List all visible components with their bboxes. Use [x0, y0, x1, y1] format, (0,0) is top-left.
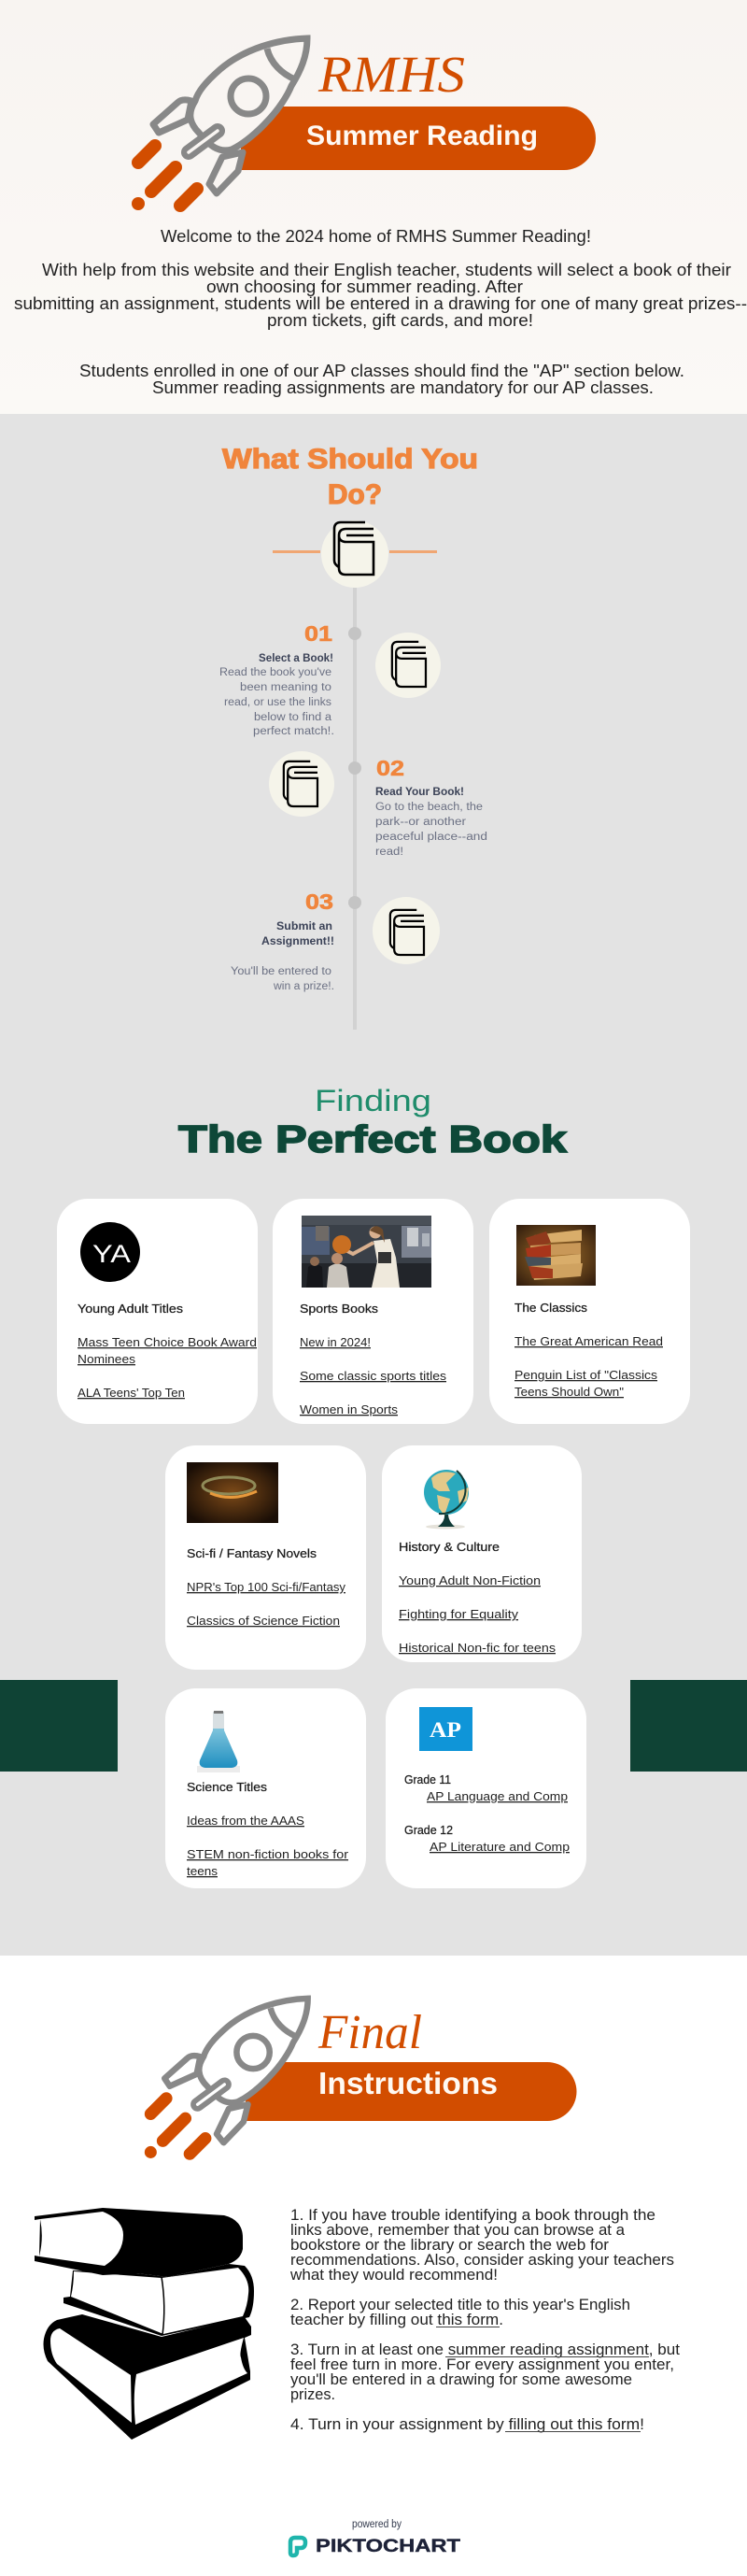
step 2: 2. Report your selected title to this year's English — [290, 2297, 630, 2313]
step 3: you'll be entered in a drawing for some awesome — [290, 2371, 632, 2388]
step 01: perfect match!. — [253, 726, 334, 737]
text block: welcome: prom tickets, gift cards, and more! — [267, 311, 533, 330]
step 1: 1. If you have trouble identifying a book through the — [290, 2207, 655, 2224]
panel: grey section background — [0, 414, 747, 1956]
card: sports books: Women in Sports — [300, 1402, 399, 1416]
step 01: Read the book you've — [219, 667, 331, 678]
icon: rocket — [145, 1999, 308, 2158]
card: science titles — [165, 1688, 366, 1888]
card: science titles: Ideas from the AAAS — [187, 1814, 304, 1828]
subtitle: Summer Reading: Summer Reading — [306, 121, 538, 151]
icon: globe — [424, 1470, 469, 1529]
orange banner pill — [241, 107, 596, 170]
step 01: below to find a — [254, 712, 332, 723]
card: young adult titles: ALA Teens' Top Ten — [78, 1386, 185, 1400]
text block: welcome: Summer reading assignments are mandatory for our AP classes. — [152, 378, 654, 397]
card: AP classes: Grade 11 — [404, 1772, 451, 1786]
card: history and culture: Fighting for Equality — [399, 1607, 519, 1621]
decorative band: right — [630, 1680, 747, 1772]
icon: AP logo: AP — [430, 1718, 461, 1742]
title: Final: Final — [317, 2006, 422, 2059]
card: sports books: New in 2024! — [300, 1335, 371, 1349]
footer: powered by piktochart: powered by — [352, 2519, 402, 2530]
card: the classics — [489, 1199, 690, 1424]
step 01: Select a Book! — [259, 653, 333, 664]
icon: rocket exhaust — [132, 146, 197, 210]
step 02 — [269, 751, 487, 858]
icon: YA badge — [80, 1222, 140, 1282]
icon: heading book — [321, 520, 388, 588]
card: young adult titles: Nominees — [78, 1352, 136, 1366]
card: AP classes — [386, 1688, 586, 1888]
icon: AP logo — [419, 1707, 472, 1751]
step 01: 01 — [304, 621, 332, 646]
step 03: You'll be entered to — [231, 966, 331, 977]
heading: what should you do: Do? — [328, 479, 382, 510]
step 02: 02 — [376, 756, 404, 780]
card: AP classes: AP Language and Comp — [427, 1789, 568, 1803]
step 1: links above, remember that you can browse at a — [290, 2222, 626, 2239]
step 03 — [231, 890, 440, 992]
text block: welcome: Welcome to the 2024 home of RMHS Summer Reading! — [161, 227, 591, 246]
step 1: bookstore or the library or search the web for — [290, 2237, 610, 2254]
card: young adult titles — [57, 1199, 258, 1424]
icon: flask — [197, 1711, 240, 1772]
orange banner pill — [246, 2062, 577, 2121]
card: history and culture: History & Culture — [399, 1540, 500, 1554]
step 02: peaceful place--and — [375, 832, 487, 843]
heading: finding the perfect book: The Perfect Book — [178, 1117, 567, 1160]
card: AP classes: AP Literature and Comp — [430, 1840, 570, 1854]
heading: what should you do: What Should You — [222, 444, 478, 475]
card: sports books — [273, 1199, 473, 1424]
card: young adult titles: Young Adult Titles — [78, 1302, 184, 1316]
image: basketball player — [302, 1216, 431, 1288]
heading: finding the perfect book: Finding — [315, 1084, 431, 1117]
step 02: read! — [375, 847, 403, 858]
card: science titles: teens — [187, 1864, 218, 1878]
text block: welcome: submitting an assignment, students will be entered in a drawing for one of many great prizes-- — [14, 294, 747, 313]
decorative band: left — [0, 1680, 118, 1772]
step 1: recommendations. Also, consider asking your teachers — [290, 2252, 674, 2269]
step 02: Read Your Book! — [375, 787, 464, 798]
step 1 — [289, 2207, 674, 2284]
text block: welcome: own choosing for summer reading. After — [206, 278, 523, 296]
footer: powered by piktochart: PIKTOCHART — [316, 2537, 460, 2556]
step 03: 03 — [305, 890, 333, 914]
step 02: Go to the beach, the — [375, 802, 483, 813]
text block: welcome — [14, 227, 747, 397]
step 3: 3. Turn in at least one summer reading assignment, but — [290, 2341, 680, 2358]
card: sci-fi and fantasy: NPR's Top 100 Sci-fi/Fantasy — [187, 1580, 345, 1594]
card: history and culture — [382, 1445, 582, 1662]
image: ring — [187, 1462, 278, 1523]
title: RMHS: RMHS — [317, 46, 465, 103]
card: young adult titles: Mass Teen Choice Book Award — [78, 1335, 257, 1349]
card: the classics: Teens Should Own" — [514, 1385, 624, 1399]
step 01: been meaning to — [240, 682, 331, 693]
icon: piktochart logo — [290, 2538, 305, 2555]
heading: finding the perfect book — [178, 1084, 567, 1160]
image: old books — [516, 1225, 596, 1286]
card: science titles: STEM non-fiction books for — [187, 1847, 349, 1861]
card: history and culture: Historical Non-fic for teens — [399, 1641, 557, 1655]
text block: welcome: With help from this website and their English teacher, students will select a book of their — [42, 261, 731, 279]
step 3: feel free turn in more. For every assignment you enter, — [290, 2356, 674, 2373]
step 2 — [290, 2297, 630, 2328]
panel: header — [0, 0, 747, 414]
step 4: 4. Turn in your assignment by filling out this form! — [290, 2416, 644, 2433]
step 03: Assignment!! — [261, 936, 334, 947]
card: AP classes: Grade 12 — [404, 1823, 453, 1837]
card: sports books: Some classic sports titles — [300, 1369, 447, 1383]
text block: instructions — [289, 2207, 680, 2433]
card: sci-fi and fantasy: Classics of Science Fiction — [187, 1614, 340, 1628]
panel: what should you do — [219, 444, 487, 1030]
icon: YA badge: YA — [92, 1240, 131, 1268]
subtitle: Instructions: Instructions — [318, 2066, 498, 2100]
card: history and culture: Young Adult Non-Fiction — [399, 1573, 541, 1587]
footer: powered by piktochart — [290, 2519, 460, 2556]
step 01: read, or use the links — [224, 697, 331, 708]
step 1: what they would recommend! — [289, 2267, 498, 2284]
heading: what should you do — [222, 444, 478, 510]
step 3 — [290, 2341, 680, 2403]
step 2: teacher by filling out this form. — [290, 2312, 503, 2328]
icon: stack of books — [35, 2208, 254, 2440]
step 3: prizes. — [290, 2386, 335, 2403]
card: the classics: Penguin List of "Classics — [514, 1368, 658, 1382]
step 03: win a prize!. — [273, 981, 334, 992]
step 01 — [219, 621, 441, 737]
step 02: park--or another — [375, 817, 466, 828]
card: science titles: Science Titles — [187, 1780, 268, 1794]
panel: final instructions header — [145, 1999, 577, 2158]
card: sci-fi and fantasy — [165, 1445, 366, 1670]
card: sci-fi and fantasy: Sci-fi / Fantasy Novels — [187, 1546, 317, 1560]
card: the classics: The Great American Read — [514, 1334, 663, 1348]
text block: welcome: Students enrolled in one of our AP classes should find the "AP" section below. — [79, 362, 684, 380]
icon: rocket — [153, 38, 307, 193]
card: sports books: Sports Books — [300, 1302, 379, 1316]
card: the classics: The Classics — [514, 1301, 588, 1315]
step 03: Submit an — [276, 921, 332, 932]
